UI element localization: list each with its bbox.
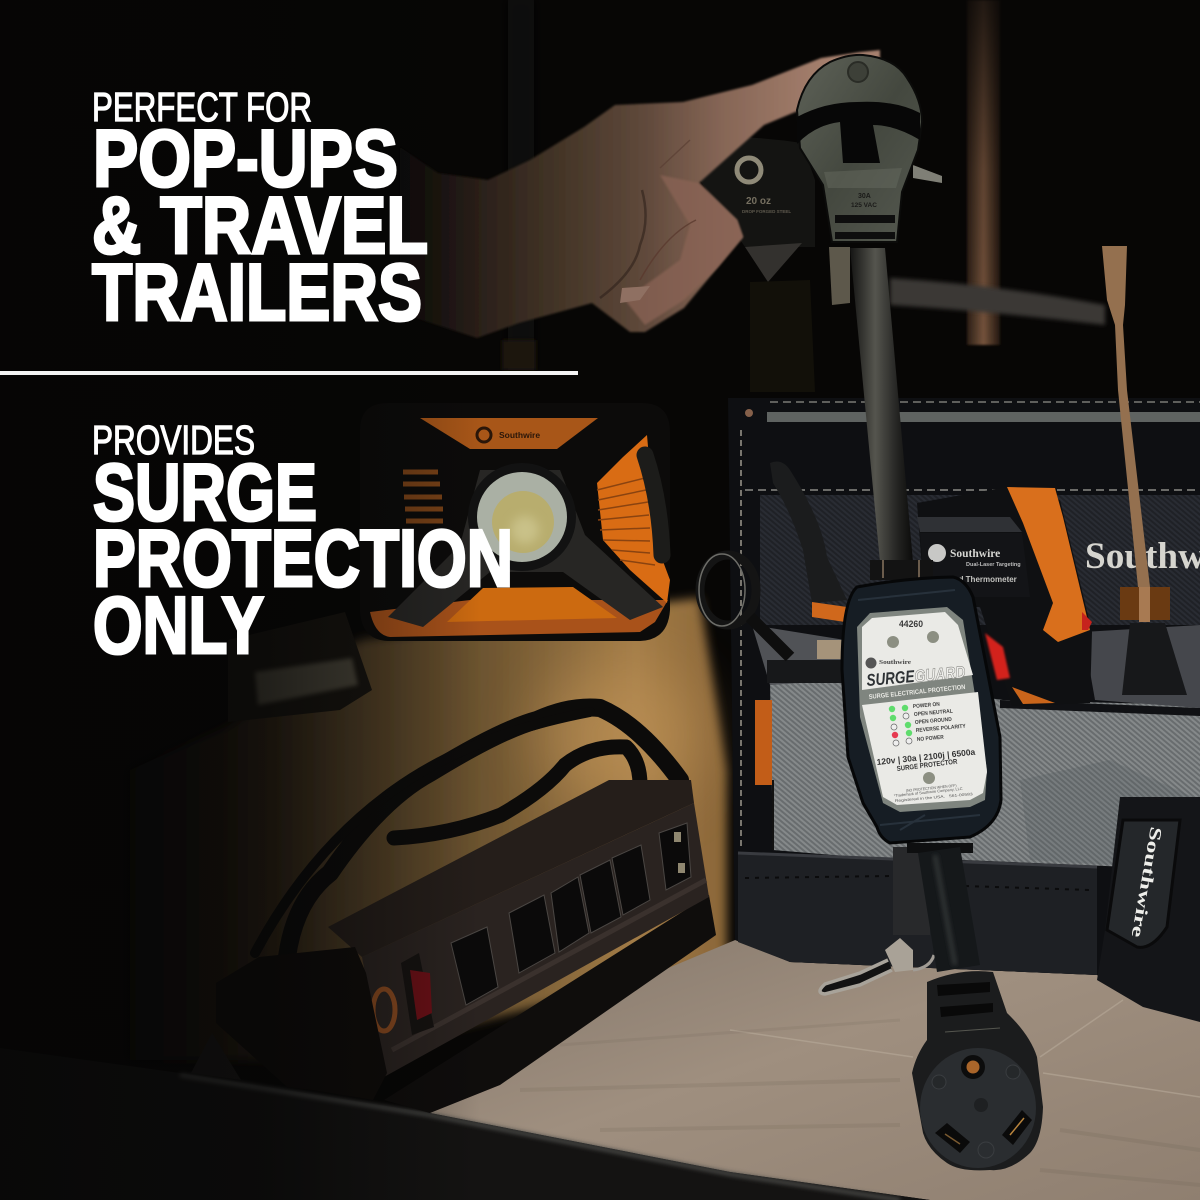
cord collar (870, 560, 933, 580)
rubber plug top (797, 55, 933, 580)
SurgeGuard device: GUARD (914, 663, 966, 686)
hammer behind hand (700, 137, 942, 392)
heading block: perfect for: PERFECT FOR (92, 84, 312, 130)
lamp top orange plate (420, 418, 598, 449)
upper cord (850, 248, 913, 562)
heading block: provides: ONLY (93, 581, 264, 671)
lamp lens (468, 463, 576, 571)
LED legend: OPEN NEUTRAL (914, 709, 954, 718)
divider line (0, 371, 578, 375)
LED legend: REVERSE POLARITY (916, 724, 966, 734)
carabiner (820, 847, 934, 994)
strip switch (401, 953, 434, 1035)
power strip cables (255, 708, 680, 957)
LED legend: NO POWER (917, 735, 944, 743)
heading block: perfect for: TRAILERS (92, 248, 422, 338)
rear bag handle (890, 278, 1105, 325)
thumb and finger shading (625, 175, 743, 325)
lamp bottom orange plate (447, 587, 617, 622)
brand (866, 658, 876, 668)
SurgeGuard device: SURGE (866, 667, 916, 690)
heading block: perfect for: & TRAVEL (92, 181, 428, 271)
work light (360, 403, 670, 641)
lamp left fins (403, 472, 443, 521)
heading block: perfect for (92, 84, 428, 338)
SurgeGuard device: SURGE PROTECTOR (896, 759, 958, 773)
fine print: (NO PROTECTION WHEN OFF) (906, 784, 957, 793)
heading block: perfect for: POP-UPS (93, 114, 398, 204)
plug slots (835, 215, 895, 239)
small lamp on the left (228, 612, 372, 722)
strip outlets (451, 823, 691, 1005)
bag mesh pockets (770, 680, 1200, 870)
LED legend: POWER ON (913, 702, 940, 710)
fine print: *Trademark of Southwire Company, LLC (894, 787, 963, 798)
rubber plug top: 125 VAC (851, 202, 877, 209)
plug head (797, 55, 922, 242)
thermometer: Dual-Laser Targeting (966, 562, 1021, 568)
mat under strip (384, 895, 716, 1113)
SurgeGuard device (842, 577, 1001, 843)
LED legend: OPEN GROUND (915, 717, 952, 726)
heading block: provides: PROTECTION (93, 514, 513, 604)
lamp frame (360, 403, 670, 641)
hammer behind hand: 20 oz (746, 196, 771, 207)
fine print: Registered in the USA. 561-00583 (895, 792, 973, 803)
heading block: provides: SURGE (93, 448, 317, 538)
plug black band (797, 102, 920, 163)
lamp grip (645, 455, 662, 555)
subtitle band: SURGE ELECTRICAL PROTECTION (868, 684, 966, 701)
thermometer (917, 487, 1092, 706)
plug label panel (824, 168, 902, 188)
lamp charcoal body (388, 470, 663, 627)
hammer behind hand: DROP FORGED STEEL (742, 209, 791, 214)
lamp right fins (597, 435, 670, 603)
power strip (191, 780, 716, 1113)
fine print (894, 784, 973, 803)
strip top face (328, 780, 694, 957)
lower white panel (862, 692, 987, 805)
wood lit highlight (540, 665, 700, 805)
strip front face (362, 803, 709, 1077)
hand pressing plug (400, 50, 880, 338)
heading block: provides: PROVIDES (92, 417, 255, 463)
model number: 44260 (899, 619, 923, 629)
strip logo (373, 989, 395, 1031)
velcro strap: Southwire (1127, 825, 1166, 940)
lower cord and plug (907, 843, 1043, 1170)
SurgeGuard device: Southwire (879, 659, 911, 666)
wood block (130, 598, 727, 1060)
lamp lower lip (370, 600, 668, 637)
key ring (700, 555, 756, 625)
pliers (770, 462, 847, 603)
trailer edge foreground (0, 1048, 930, 1200)
thermometer: red Thermometer (951, 575, 1017, 584)
upper white panel (862, 612, 973, 690)
thermometer: Southwire (950, 548, 1000, 560)
specifications: 120v | 30a | 2100j | 6500a (876, 747, 976, 767)
work light: Southwire (499, 430, 540, 440)
strip end cap (216, 947, 387, 1100)
LED legend (913, 702, 966, 743)
screwdriver (1102, 246, 1187, 695)
device faceplate (857, 607, 987, 812)
rubber plug top: 30A (858, 193, 871, 200)
velcro strap (1097, 797, 1200, 1022)
left darkening gradient (0, 0, 480, 1200)
device housing (842, 577, 1001, 843)
heading block: provides (92, 417, 513, 671)
floor (430, 938, 1200, 1200)
LED indicators (889, 705, 912, 746)
tool bag (699, 398, 1200, 1020)
